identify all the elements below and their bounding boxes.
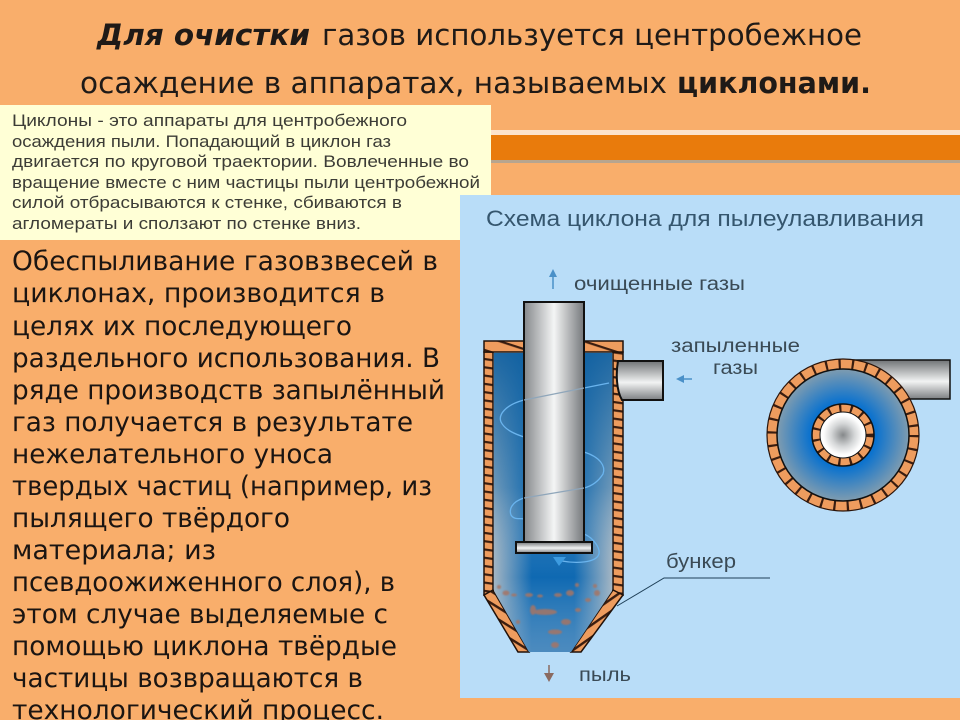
body text: Обеспыливание газовзвесей в xyxy=(12,246,438,277)
panel: cyclone diagram xyxy=(460,195,960,698)
title: циклонами. xyxy=(677,66,871,100)
leader line: bunker xyxy=(617,578,770,606)
top view inner wall xyxy=(812,404,874,466)
label: dust with arrow: пыль xyxy=(579,665,631,686)
label: dust with arrow xyxy=(544,665,631,686)
title: Для очистки xyxy=(96,18,310,52)
body text: помощью циклона твёрдые xyxy=(12,631,397,662)
body text: этом случае выделяемые с xyxy=(12,599,388,630)
top view of cyclone xyxy=(767,359,950,511)
top view blue disc xyxy=(777,369,909,501)
top view outer wall xyxy=(767,359,919,511)
panel: yellow definition box: агломераты и сползают по стенке вниз. xyxy=(12,214,361,233)
body text: газ получается в результате xyxy=(12,407,413,438)
panel: yellow definition box: двигается по круговой траектории. Вовлеченные во xyxy=(12,152,469,171)
cyclone body walls xyxy=(484,341,623,652)
body text: твердых частиц (например, из xyxy=(12,471,432,502)
body text: ряде производств запылённый xyxy=(12,375,445,406)
body text: псевдоожиженного слоя), в xyxy=(12,567,395,598)
diagram heading: Схема циклона для пылеулавливания xyxy=(486,206,924,231)
body text: частицы возвращаются в xyxy=(12,663,363,694)
body text: нежелательного уноса xyxy=(12,439,333,470)
body text: раздельного использования. В xyxy=(12,343,440,374)
cyclone blue cavity xyxy=(494,353,612,652)
body text: циклонах, производится в xyxy=(12,278,385,309)
label: dusty gases with arrow: газы xyxy=(713,358,758,379)
panel: yellow definition box: Циклоны - это аппараты для центробежного xyxy=(12,111,407,130)
dust particles xyxy=(497,583,600,648)
body text: материала; из xyxy=(12,535,216,566)
orange header stripe xyxy=(480,130,960,163)
panel: yellow definition box: силой отбрасываются к стенке, сбиваются в xyxy=(12,193,402,212)
panel: yellow definition box xyxy=(0,105,491,240)
label: bunker: бункер xyxy=(666,551,736,573)
gas inlet pipe xyxy=(617,361,663,400)
title xyxy=(80,18,871,100)
panel: yellow definition box: вращение вместе с ним частицы пыли центробежной xyxy=(12,173,480,192)
panel: yellow definition box: осаждения пыли. Попадающий в циклон газ xyxy=(12,132,391,151)
central outlet pipe xyxy=(516,302,592,566)
label: dusty gases with arrow: запыленные xyxy=(671,336,800,357)
title: осаждение в аппаратах, называемых xyxy=(80,66,667,100)
label: cleaned gases with arrow xyxy=(549,269,745,295)
body text: целях их последующего xyxy=(12,311,352,342)
body text: пылящего твёрдого xyxy=(12,503,290,534)
swirl behind pipe xyxy=(500,383,609,562)
body text xyxy=(12,246,445,720)
label: dusty gases with arrow xyxy=(671,336,800,383)
label: cleaned gases with arrow: очищенные газы xyxy=(574,274,745,295)
top view core xyxy=(820,412,866,458)
title: газов используется центробежное xyxy=(322,18,862,52)
top view inlet pipe xyxy=(843,360,950,399)
